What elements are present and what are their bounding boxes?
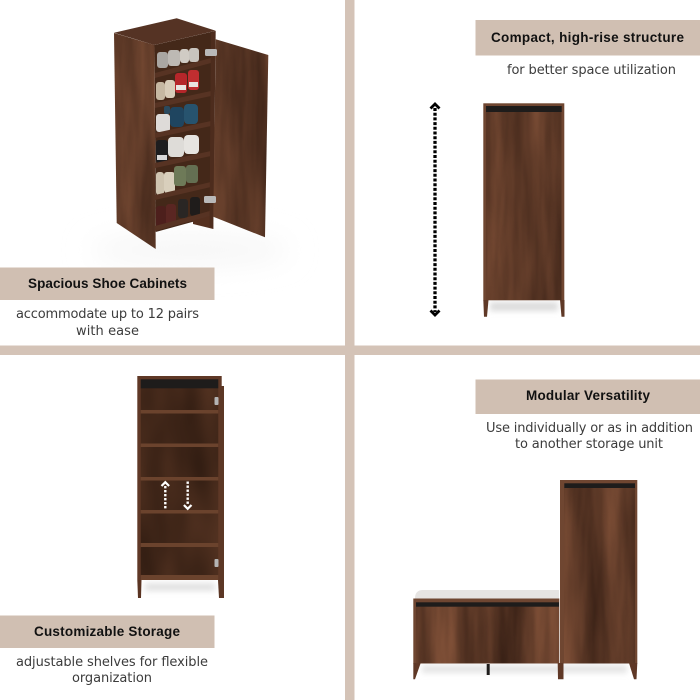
hinge: bottom	[214, 559, 218, 567]
description: organization	[72, 671, 152, 686]
shoes: black and white row	[156, 135, 199, 163]
tall slot	[564, 483, 635, 488]
bench and tall cabinet	[413, 480, 637, 679]
closed cabinet front	[483, 103, 564, 317]
shoes: red and beige row	[156, 70, 199, 100]
description: accommodate up to 12 pairs	[16, 307, 199, 322]
description	[486, 421, 693, 452]
heading bar	[476, 20, 700, 56]
bench slot	[416, 602, 559, 607]
interior back wall	[154, 31, 215, 232]
floor shadow	[145, 583, 215, 591]
bottom support	[193, 210, 213, 229]
heading bar: Customizable Storage	[34, 624, 180, 639]
shelves	[141, 410, 218, 580]
bench doors	[416, 607, 559, 663]
right side panel edge	[210, 31, 216, 229]
divider: vertical	[345, 0, 354, 700]
heading bar: Compact, high-rise structure	[491, 30, 684, 45]
door	[213, 39, 268, 238]
hinge: bottom	[204, 196, 216, 203]
black slot	[141, 379, 218, 388]
door edge	[220, 386, 224, 598]
arrow: down	[184, 482, 192, 509]
heading bar	[0, 268, 214, 300]
bench cushion	[415, 590, 559, 598]
description: for better space utilization	[507, 63, 676, 78]
side panel	[114, 33, 156, 249]
description: Use individually or as in addition	[486, 421, 693, 436]
bench center leg	[487, 664, 490, 675]
heading bar	[476, 380, 700, 414]
heading bar: Spacious Shoe Cabinets	[28, 276, 187, 291]
interior back	[141, 388, 218, 580]
panel: customizable storage	[0, 376, 224, 686]
panel: modular versatility	[413, 380, 700, 679]
floor shadow	[90, 236, 290, 264]
description: with ease	[76, 324, 139, 339]
hinge: top	[205, 49, 217, 56]
top panel	[114, 18, 216, 45]
arrow: up	[162, 482, 169, 509]
floor shadow	[490, 302, 558, 311]
description: adjustable shelves for flexible	[16, 655, 208, 670]
divider: horizontal	[0, 346, 700, 355]
heading bar: Modular Versatility	[526, 388, 650, 403]
description	[16, 655, 208, 686]
hinge: top	[214, 397, 218, 405]
tall cabinet body	[560, 480, 637, 664]
shoes: dark row	[156, 197, 200, 227]
shelves	[155, 58, 211, 231]
open cabinet front view	[137, 376, 224, 598]
heading bar	[0, 616, 214, 648]
shoes: navy and white row	[156, 104, 198, 132]
height arrow	[430, 104, 440, 315]
open cabinet with shoes	[110, 18, 272, 252]
door	[486, 112, 562, 300]
panel: compact high-rise structure	[430, 20, 700, 317]
description	[16, 307, 199, 339]
tall door	[564, 488, 635, 664]
shoes: top row	[157, 48, 199, 68]
bench body	[413, 598, 559, 664]
floor shadow	[422, 665, 627, 673]
black slot	[486, 106, 562, 112]
shoes: green and cream row	[156, 165, 198, 195]
panel: spacious shoe cabinets	[0, 18, 290, 339]
description: to another storage unit	[515, 437, 663, 452]
